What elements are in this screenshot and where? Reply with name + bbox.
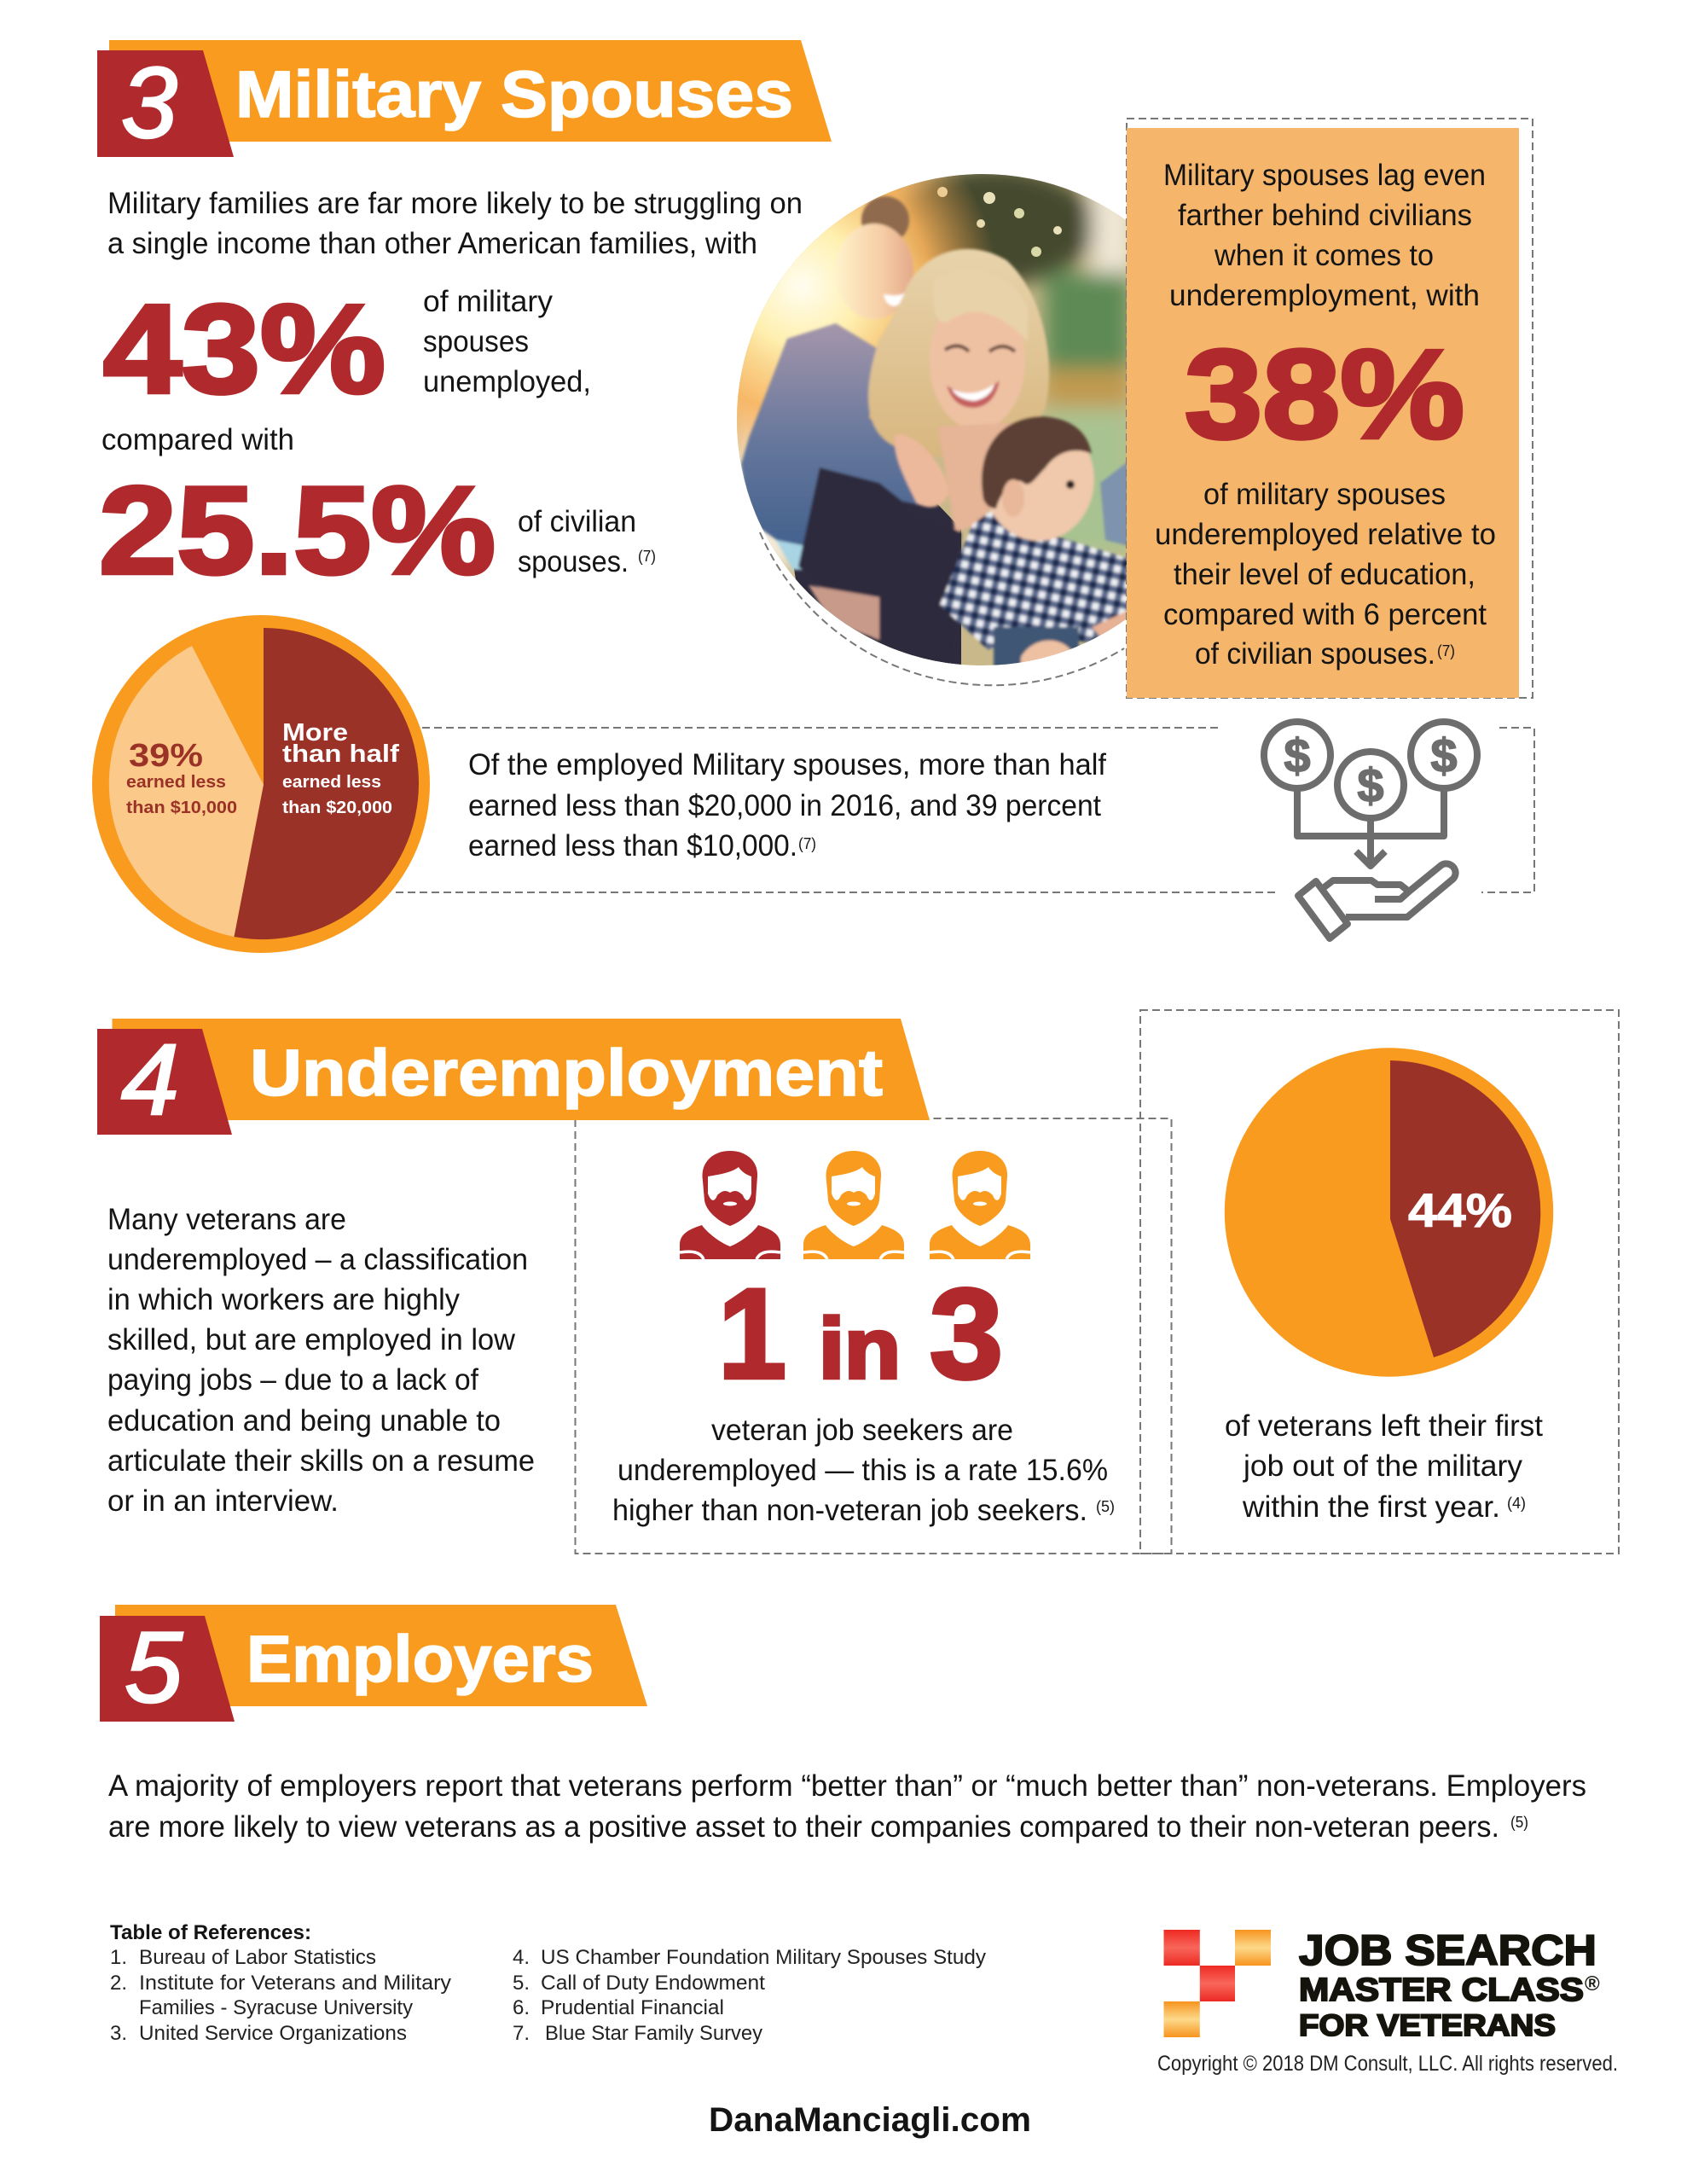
references left column: Institute for Veterans and Military	[139, 1972, 451, 1995]
references left column	[110, 1946, 451, 2045]
pie chart: 44% left first job	[1225, 1048, 1553, 1377]
stat: 38%: 38%	[1185, 324, 1464, 465]
references heading: Table of References:	[110, 1921, 311, 1944]
references left column: United Service Organizations	[139, 2022, 407, 2045]
icon: person 2	[803, 1151, 904, 1259]
stat: 1 in 3: 3	[930, 1262, 1003, 1405]
text block: underemployment explanation: Many veterans are	[107, 1203, 346, 1236]
callout lead text: underemployment, with	[1169, 279, 1480, 312]
references left column: Families - Syracuse University	[139, 1996, 413, 2019]
text block: employers: A majority of employers report that veterans perform “better than” or “much better than” non-veterans. Employers	[108, 1769, 1586, 1803]
label: more than half: than $20,000	[282, 799, 392, 817]
references right column: Prudential Financial	[541, 1996, 724, 2019]
dashed frame: 44% panel	[1140, 1010, 1619, 1554]
icon: coins falling into hand	[1264, 722, 1477, 938]
photo: mother with two children	[737, 174, 1127, 665]
stat: 25.5% civilian spouses: spouses.	[518, 545, 629, 578]
references left column: Bureau of Labor Statistics	[139, 1946, 376, 1969]
text block: underemployment explanation: articulate their skills on a resume	[107, 1444, 535, 1478]
logo wordmark	[1299, 1926, 1600, 2042]
icon: person 3	[930, 1151, 1030, 1259]
label: more than half	[282, 719, 399, 817]
title: Employers	[246, 1623, 594, 1696]
stat: 25.5% civilian spouses	[99, 461, 656, 600]
panel: underemployment callout	[1127, 119, 1533, 698]
callout body text: of military spouses	[1203, 478, 1446, 511]
label: 39%: than $10,000	[126, 799, 237, 817]
logo wordmark: MASTER CLASS	[1299, 1972, 1584, 2008]
icon: coins falling into hand: $	[1284, 729, 1311, 782]
text block: employers: are more likely to view veterans as a positive asset to their companies compared to their non-veteran peers.	[108, 1810, 1499, 1844]
copyright: Copyright © 2018 DM Consult, LLC. All rights reserved.	[1157, 2052, 1618, 2076]
references right column: 7.	[513, 2022, 530, 2045]
text block: 1 in 3 caption: higher than non-veteran job seekers.	[612, 1494, 1087, 1527]
references right column: 5.	[513, 1972, 530, 1995]
dashed frame: earnings text	[391, 728, 1534, 892]
title: Underemployment	[250, 1037, 883, 1110]
references right column: Blue Star Family Survey	[545, 2022, 762, 2045]
text block: 44% caption	[1225, 1409, 1543, 1524]
callout lead text: Military spouses lag even	[1163, 159, 1486, 192]
text block: earnings: earned less than $10,000.	[468, 829, 797, 863]
text block: 1 in 3 caption: (5)	[1096, 1498, 1115, 1515]
badge	[100, 1616, 235, 1722]
icon: coins falling into hand: $	[1357, 758, 1384, 812]
text block: intro: Military families are far more likely to be struggling on	[107, 187, 803, 220]
text block: underemployment explanation: underemployed – a classification	[107, 1243, 528, 1276]
text block: underemployment explanation: skilled, but are employed in low	[107, 1323, 516, 1356]
label: 39%	[126, 738, 237, 817]
callout body text: compared with 6 percent	[1163, 598, 1487, 631]
icon: coins falling into hand: $	[1430, 729, 1458, 782]
references table	[110, 1921, 986, 2045]
callout lead text: when it comes to	[1214, 239, 1434, 272]
text block: 44% caption: job out of the military	[1243, 1449, 1522, 1483]
callout body text	[1155, 478, 1496, 671]
heading: section 3 Military Spouses	[97, 40, 832, 160]
callout body text: (7)	[1437, 642, 1455, 659]
text block: intro: a single income than other American families, with	[107, 227, 757, 260]
number 4: 4	[121, 1024, 179, 1136]
stat: 43% unemployed	[103, 279, 591, 420]
references left column: 2.	[110, 1972, 127, 1995]
icon: highlighted person	[680, 1151, 780, 1259]
number 5: 5	[125, 1612, 183, 1724]
pie chart: spouse earnings	[92, 615, 430, 953]
text block: earnings: Of the employed Military spouses, more than half	[468, 748, 1106, 781]
label: 39%: 39%	[129, 738, 203, 774]
label: more than half: than half	[282, 741, 399, 768]
stat: 25.5% civilian spouses: of civilian	[518, 505, 636, 538]
website: DanaManciagli.com	[709, 2101, 1031, 2139]
badge: red number tab	[97, 50, 234, 157]
stat: 1 in 3: 1	[718, 1262, 786, 1405]
text block: 1 in 3 caption: veteran job seekers are	[711, 1414, 1013, 1447]
dashed arc around photo	[760, 532, 1124, 685]
text block: 1 in 3 caption: underemployed — this is a rate 15.6%	[617, 1454, 1108, 1487]
heading: section 5 Employers	[100, 1605, 647, 1724]
callout body text: underemployed relative to	[1155, 518, 1496, 551]
label: 39%: earned less	[126, 773, 226, 792]
label: more than half: earned less	[282, 773, 381, 792]
references right column: US Chamber Foundation Military Spouses Study	[541, 1946, 986, 1969]
stat: 1 in 3	[718, 1262, 1003, 1405]
references right column	[513, 1946, 986, 2045]
text block: employers: (5)	[1510, 1814, 1528, 1831]
text block: earnings: (7)	[798, 835, 816, 852]
text block: underemployment explanation	[107, 1203, 535, 1518]
badge	[97, 1029, 232, 1135]
text block: 1 in 3 caption	[612, 1414, 1115, 1527]
orange fill	[1127, 128, 1519, 698]
text block: earnings	[468, 748, 1106, 863]
stat: 43% unemployed: 43%	[103, 279, 386, 420]
text block: 44% caption: (4)	[1507, 1495, 1526, 1512]
text block: employers	[108, 1769, 1586, 1844]
references left column: 3.	[110, 2022, 127, 2045]
logo wordmark: FOR VETERANS	[1299, 2009, 1556, 2042]
logo: Job Search Master Class	[1163, 1926, 1600, 2042]
dashed frame: 1 in 3 panel	[575, 1118, 1172, 1554]
heading: section 4 Underemployment	[97, 1019, 930, 1136]
dashed frame	[1127, 119, 1533, 698]
stat: 1 in 3: in	[819, 1301, 901, 1397]
text block: 44% caption: within the first year.	[1242, 1490, 1500, 1524]
stat: 43% unemployed: spouses	[423, 325, 529, 358]
references right column: 4.	[513, 1946, 530, 1969]
logo squares	[1163, 1930, 1271, 2037]
text block: underemployment explanation: education and being unable to	[107, 1404, 501, 1438]
callout lead text: farther behind civilians	[1178, 199, 1472, 232]
text block: intro	[107, 187, 803, 260]
icons: three veterans	[680, 1151, 1030, 1259]
text block: underemployment explanation: in which workers are highly	[107, 1283, 460, 1316]
text: compared with: compared with	[101, 423, 294, 456]
text block: underemployment explanation: paying jobs – due to a lack of	[107, 1363, 478, 1397]
label: more than half: More	[282, 719, 348, 746]
number 3: 3	[121, 47, 177, 160]
banner	[113, 1019, 930, 1120]
references left column: 1.	[110, 1946, 127, 1969]
callout lead text	[1163, 159, 1486, 312]
callout body text: of civilian spouses.	[1195, 637, 1435, 671]
references right column: Call of Duty Endowment	[541, 1972, 765, 1995]
callout body text: their level of education,	[1174, 558, 1475, 591]
text block: 44% caption: of veterans left their first	[1225, 1409, 1543, 1443]
text block: underemployment explanation: or in an interview.	[107, 1484, 339, 1518]
banner	[115, 1605, 647, 1706]
logo wordmark: ®	[1585, 1972, 1600, 1995]
banner: orange ribbon	[109, 40, 832, 142]
stat: 43% unemployed: of military	[423, 285, 553, 318]
logo wordmark: JOB SEARCH	[1299, 1926, 1597, 1974]
text block: earnings: earned less than $20,000 in 2016, and 39 percent	[468, 789, 1101, 822]
references right column: 6.	[513, 1996, 530, 2019]
stat: 43% unemployed: unemployed,	[423, 365, 591, 398]
stat: 25.5% civilian spouses: 25.5%	[99, 461, 496, 600]
stat: 25.5% civilian spouses: (7)	[638, 548, 656, 565]
label: 44%: 44%	[1408, 1183, 1512, 1237]
title text: Military Spouses	[235, 58, 793, 131]
